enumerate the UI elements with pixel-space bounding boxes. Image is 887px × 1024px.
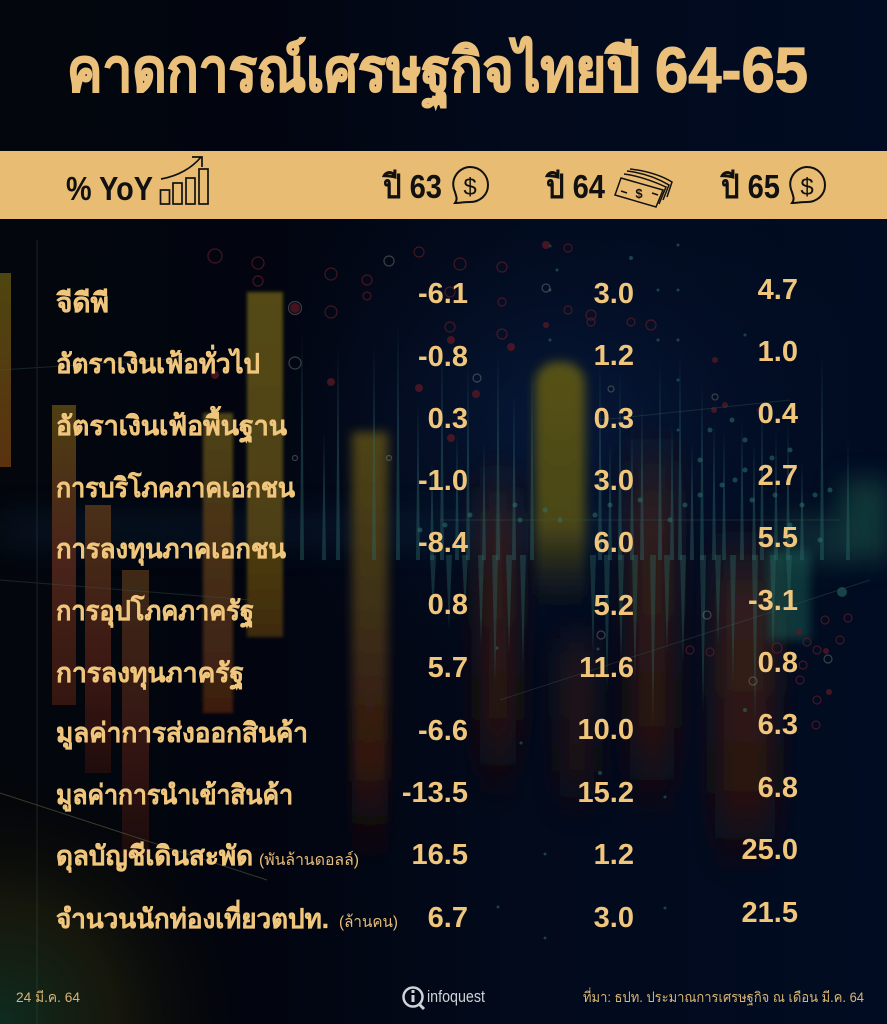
row: goods imports: 15.2 [578, 777, 634, 809]
row: private consumption: 3.0 [594, 465, 634, 497]
row: GDP: -6.1 [418, 278, 468, 310]
row: core inflation: 0.3 [594, 403, 634, 435]
row: current account: ดุลบัญชีเดินสะพัด [56, 841, 253, 873]
row: headline inflation: อัตราเงินเฟ้อทั่วไป [56, 344, 260, 379]
row: foreign tourists: จำนวนนักท่องเที่ยวตปท. [56, 899, 329, 934]
row: private consumption: การบริโภคภาคเอกชน [56, 471, 296, 503]
row: headline inflation: -0.8 [418, 341, 468, 373]
row: goods imports [56, 772, 798, 812]
row: public investment [56, 647, 798, 691]
row: GDP: 4.7 [758, 274, 798, 306]
header band [0, 151, 887, 219]
row: public investment: 11.6 [579, 652, 634, 684]
row: foreign tourists: 3.0 [594, 902, 634, 934]
row: public investment: การลงทุนภาครัฐ [56, 658, 244, 691]
footer date: 24 มี.ค. 64 [16, 989, 80, 1005]
row: foreign tourists: 6.7 [428, 902, 468, 934]
row: private investment: การลงทุนภาคเอกชน [56, 534, 287, 566]
row: public consumption: การอุปโภคภาครัฐ [56, 594, 254, 629]
row: public consumption [56, 585, 798, 629]
row: goods exports [56, 709, 798, 750]
row: public consumption: 0.8 [428, 589, 468, 621]
year 65 heading with dollar bubble: $ [800, 174, 814, 201]
row: current account: 16.5 [412, 839, 468, 871]
year 63 heading with dollar bubble [382, 167, 488, 205]
row: current account: (พันล้านดอลล์) [259, 850, 359, 869]
row: goods imports: -13.5 [402, 777, 468, 809]
row: private investment: 6.0 [594, 527, 634, 559]
row: goods imports: 6.8 [758, 772, 798, 804]
row: private investment: -8.4 [418, 527, 468, 559]
row: headline inflation: 1.0 [758, 336, 798, 368]
row: GDP [56, 274, 798, 318]
row: private consumption: 2.7 [758, 460, 798, 492]
infoquest logo: infoquest [427, 987, 485, 1006]
year 64 heading with banknotes icon [545, 168, 672, 207]
year 63 heading with dollar bubble: $ [463, 174, 477, 201]
row: public consumption: -3.1 [748, 585, 798, 617]
row: foreign tourists: 21.5 [742, 897, 798, 929]
row: private consumption: -1.0 [418, 465, 468, 497]
row: goods imports: มูลค่าการนำเข้าสินค้า [56, 780, 293, 812]
row: public investment: 5.7 [428, 652, 468, 684]
year 63 heading with dollar bubble: ปี 63 [382, 168, 442, 205]
row: core inflation [56, 398, 798, 444]
year 64 heading with banknotes icon: ปี 64 [545, 168, 606, 205]
row: GDP: 3.0 [594, 278, 634, 310]
year 65 heading with dollar bubble [720, 167, 825, 205]
row: foreign tourists [56, 897, 798, 934]
row: headline inflation [56, 336, 798, 379]
row: current account: 1.2 [594, 839, 634, 871]
title: คาดการณ์เศรษฐกิจไทยปี [67, 35, 640, 109]
YoY heading with growth chart icon [66, 157, 208, 207]
row: goods exports: -6.6 [418, 715, 468, 747]
table rows [56, 274, 798, 934]
row: core inflation: 0.3 [428, 403, 468, 435]
infoquest logo [404, 987, 485, 1009]
row: foreign tourists: (ล้านคน) [339, 913, 398, 931]
title: 64-65 [655, 34, 808, 106]
row: private investment: 5.5 [758, 522, 798, 554]
YoY heading with growth chart icon: % YoY [66, 170, 153, 207]
row: current account: 25.0 [742, 834, 798, 866]
row: goods exports: มูลค่าการส่งออกสินค้า [56, 718, 308, 750]
row: GDP: จีดีพี [56, 288, 109, 318]
row: core inflation: 0.4 [758, 398, 798, 430]
row: public investment: 0.8 [758, 647, 798, 679]
row: core inflation: อัตราเงินเฟ้อพื้นฐาน [56, 405, 288, 444]
row: current account [56, 834, 798, 873]
footer source: ที่มา: ธปท. ประมาณการเศรษฐกิจ ณ เดือน มี.ค. 64 [583, 988, 864, 1006]
year 65 heading with dollar bubble: ปี 65 [720, 168, 780, 205]
row: public consumption: 5.2 [594, 590, 634, 622]
row: headline inflation: 1.2 [594, 340, 634, 372]
row: goods exports: 6.3 [758, 709, 798, 741]
row: private consumption [56, 460, 798, 503]
row: private investment [56, 522, 798, 566]
year 64 heading with banknotes icon: $ [635, 186, 643, 201]
row: goods exports: 10.0 [578, 714, 634, 746]
